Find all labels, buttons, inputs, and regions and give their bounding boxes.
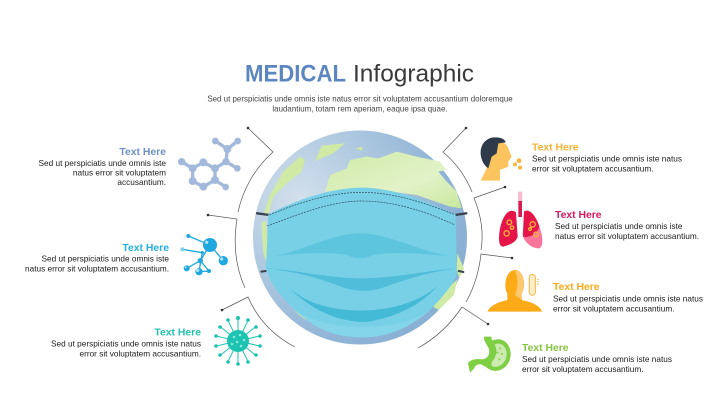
- subtitle text block: laudantium, totam rem aperiam, eaque ipsa quae.: [272, 104, 448, 114]
- text block: [51, 328, 201, 359]
- text block: natus error sit voluptatem accusantium.: [555, 232, 699, 241]
- text block: Text Here: [555, 210, 602, 221]
- text block: Text Here: [154, 328, 201, 339]
- right item 1: [481, 137, 682, 181]
- icon: stomach: [468, 337, 511, 373]
- text block: Text Here: [532, 143, 579, 154]
- right item 2: [499, 192, 699, 248]
- globe with face mask: [257, 143, 466, 337]
- icon: person with fever: [488, 270, 542, 312]
- subtitle text block: [207, 94, 513, 114]
- text block: Sed ut perspiciatis unde omnis iste natus: [532, 155, 682, 164]
- text block: Sed ut perspiciatis unde omnis iste: [555, 222, 683, 231]
- text block: error sit voluptatem accusantium.: [79, 350, 201, 359]
- left item 3: [51, 316, 262, 366]
- icon: coughing head: [481, 137, 522, 181]
- mask: [266, 188, 457, 337]
- right item 3: [488, 270, 703, 314]
- text block: Sed ut perspiciatis unde omnis iste natus: [51, 340, 201, 349]
- text block: [553, 282, 703, 314]
- text block: Sed ut perspiciatis unde omnis iste natus: [553, 295, 703, 304]
- text block: [532, 143, 682, 174]
- land masses: [261, 143, 464, 320]
- title: Infographic: [353, 60, 474, 88]
- text block: [39, 147, 166, 187]
- icon: cell network: [180, 234, 228, 275]
- title: [245, 60, 474, 88]
- text block: [522, 343, 672, 374]
- text block: Sed ut perspiciatis unde omnis iste natus: [522, 355, 672, 364]
- text block: natus error sit voluptatem accusantium.: [25, 265, 169, 274]
- title: MEDICAL: [245, 60, 346, 88]
- text block: Sed ut perspiciatis unde omnis iste: [39, 159, 166, 168]
- text block: Text Here: [122, 243, 169, 254]
- text block: accusantium.: [117, 178, 166, 187]
- left item 2: [25, 234, 228, 275]
- globe sea: [253, 130, 467, 344]
- icon: molecule: [178, 138, 241, 191]
- text block: Sed ut perspiciatis unde omnis iste: [42, 255, 169, 264]
- subtitle text block: Sed ut perspiciatis unde omnis iste natus error sit voluptatem accusantium doloremque: [207, 94, 513, 104]
- text block: error sit voluptatem accusantium.: [522, 365, 644, 374]
- text block: Text Here: [119, 147, 166, 158]
- text block: Text Here: [553, 282, 600, 293]
- icon: virus: [214, 316, 262, 366]
- mask straps: [257, 213, 466, 272]
- left item 1: [39, 138, 241, 191]
- text block: Text Here: [522, 343, 569, 354]
- text block: error sit voluptatem accusantium.: [553, 305, 675, 314]
- icon: lungs: [499, 192, 542, 248]
- text block: error sit voluptatem accusantium.: [532, 165, 654, 174]
- text block: natus error sit voluptatem: [73, 169, 166, 178]
- right item 4: [468, 337, 672, 374]
- ring segments and leader lines: [207, 127, 513, 348]
- text block: [555, 210, 699, 241]
- text block: [25, 243, 169, 274]
